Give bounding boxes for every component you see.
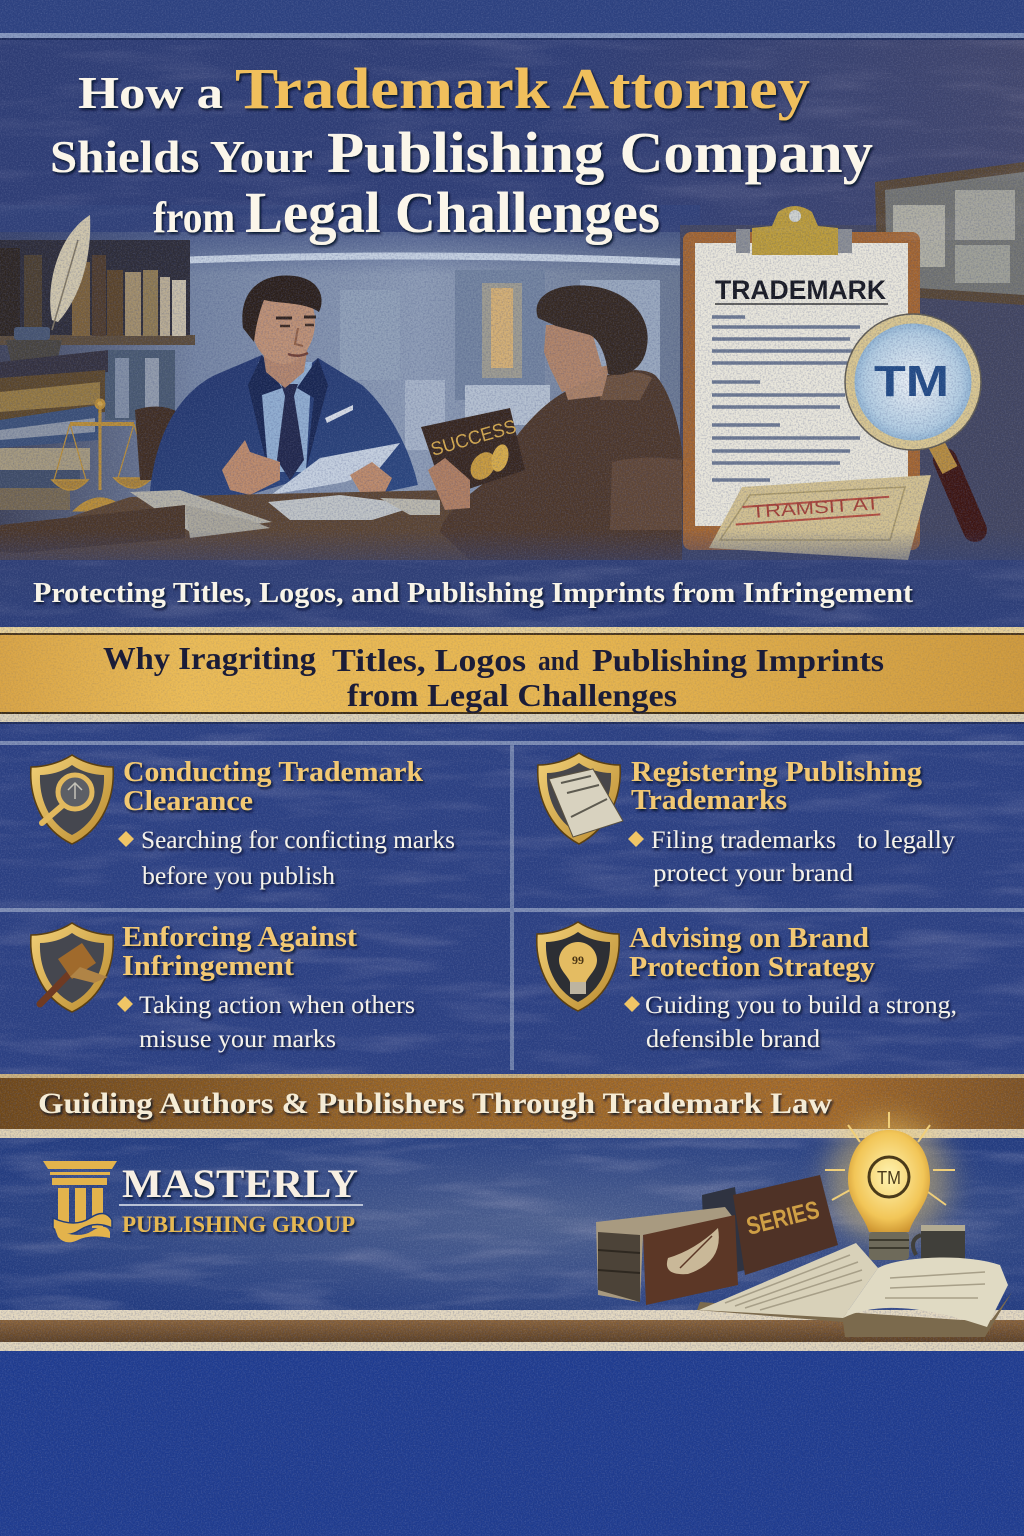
scene fade — [0, 530, 1024, 627]
top band — [0, 0, 1024, 40]
bullet diamond — [118, 831, 134, 847]
scales of justice — [52, 400, 152, 510]
panel: enforcing against infringement — [31, 922, 415, 1053]
description: before you publish — [142, 863, 336, 890]
heading: Enforcing Against — [122, 922, 358, 953]
stack of books — [0, 350, 108, 510]
bullet diamond — [117, 996, 133, 1012]
document lines — [712, 304, 888, 480]
series book — [702, 1175, 838, 1280]
gold banner heading — [103, 640, 884, 713]
open book — [697, 1243, 1012, 1337]
clip — [736, 206, 852, 255]
panel: conducting trademark clearance — [31, 755, 455, 890]
heading — [629, 923, 875, 983]
title — [50, 56, 873, 245]
description — [651, 827, 956, 887]
description: Searching for conficting marks — [141, 827, 455, 854]
panel: registering publishing trademarks — [538, 753, 956, 887]
description: defensible brand — [646, 1026, 821, 1053]
description — [139, 992, 415, 1053]
title: Publishing Company — [327, 120, 873, 185]
heading: Clearance — [123, 786, 253, 817]
illustration: consultation scene — [0, 215, 683, 560]
stamped envelope: TRAMSIT AT — [751, 493, 880, 522]
panel: advising on brand protection strategy — [537, 922, 957, 1053]
description: to legally — [857, 827, 956, 854]
title: Legal Challenges — [245, 180, 660, 245]
rule — [119, 1204, 363, 1206]
bullet diamond — [628, 831, 644, 847]
icon: shield with magnifier — [31, 755, 113, 844]
heading: Conducting Trademark — [123, 757, 423, 788]
trademark heading: TRADEMARK — [715, 275, 886, 305]
bronze banner heading: Guiding Authors & Publishers Through Trademark Law — [38, 1087, 832, 1120]
hero background — [0, 40, 1024, 627]
gold banner heading: Why Iragriting — [103, 640, 316, 676]
clipboard — [683, 206, 931, 560]
description: Filing trademarks — [651, 827, 836, 854]
icon: column — [43, 1161, 117, 1242]
bronze banner background — [0, 1074, 1024, 1138]
feature panels background — [0, 724, 1024, 1074]
heading — [123, 757, 423, 817]
attorney — [150, 275, 418, 498]
gold banner heading: from Legal Challenges — [347, 677, 677, 713]
heading: Advising on Brand — [629, 923, 869, 954]
title: Trademark Attorney — [235, 56, 810, 121]
chair — [135, 406, 178, 480]
stamped envelope — [709, 475, 931, 560]
desk — [0, 490, 480, 560]
heading: Protection Strategy — [629, 952, 875, 983]
icon: shield with gavel — [31, 923, 113, 1012]
magnifying glass: TM — [874, 357, 949, 406]
mug — [913, 1225, 965, 1261]
heading — [631, 757, 922, 816]
gold banner background — [0, 627, 1024, 724]
client: SUCCESS — [429, 416, 519, 461]
light bulb: TM — [877, 1168, 901, 1188]
light bulb — [825, 1112, 955, 1260]
heading: Registering Publishing — [631, 757, 922, 788]
subtitle: Protecting Titles, Logos, and Publishing Imprints from Infringement — [33, 578, 914, 609]
gold banner heading: and — [538, 646, 579, 677]
wordmark: MASTERLY — [122, 1161, 358, 1206]
logo: Masterly Publishing Group — [43, 1161, 363, 1242]
heading: Trademarks — [631, 785, 787, 816]
magnifying glass — [845, 314, 981, 530]
icon: shield with documents — [538, 753, 623, 844]
client — [421, 285, 683, 560]
description: Taking action when others — [139, 992, 415, 1019]
top-right notice board — [875, 162, 1024, 305]
tagline: PUBLISHING GROUP — [122, 1212, 355, 1237]
description: misuse your marks — [139, 1026, 336, 1053]
footer background — [0, 1138, 1024, 1536]
footer illustration: books and light bulb — [596, 1112, 1012, 1337]
bullet diamond — [624, 996, 640, 1012]
description: protect your brand — [653, 860, 854, 887]
icon: shield with light bulb — [537, 922, 619, 1011]
icon: shield with light bulb: 99 — [572, 953, 584, 967]
window background — [140, 256, 680, 450]
description — [141, 827, 455, 890]
description: Guiding you to build a strong, — [645, 992, 957, 1019]
series book: SERIES — [744, 1196, 822, 1241]
title: from — [153, 193, 235, 242]
title: Shields Your — [50, 131, 313, 182]
gold banner heading: Titles, Logos — [332, 642, 526, 678]
heading: Infringement — [122, 951, 295, 982]
description — [645, 992, 957, 1053]
gold banner heading: Publishing Imprints — [592, 642, 884, 678]
title: How a — [78, 67, 223, 118]
bookshelf — [0, 240, 195, 420]
quill and ink — [6, 215, 90, 366]
leaf book — [596, 1207, 738, 1305]
heading — [122, 922, 358, 982]
